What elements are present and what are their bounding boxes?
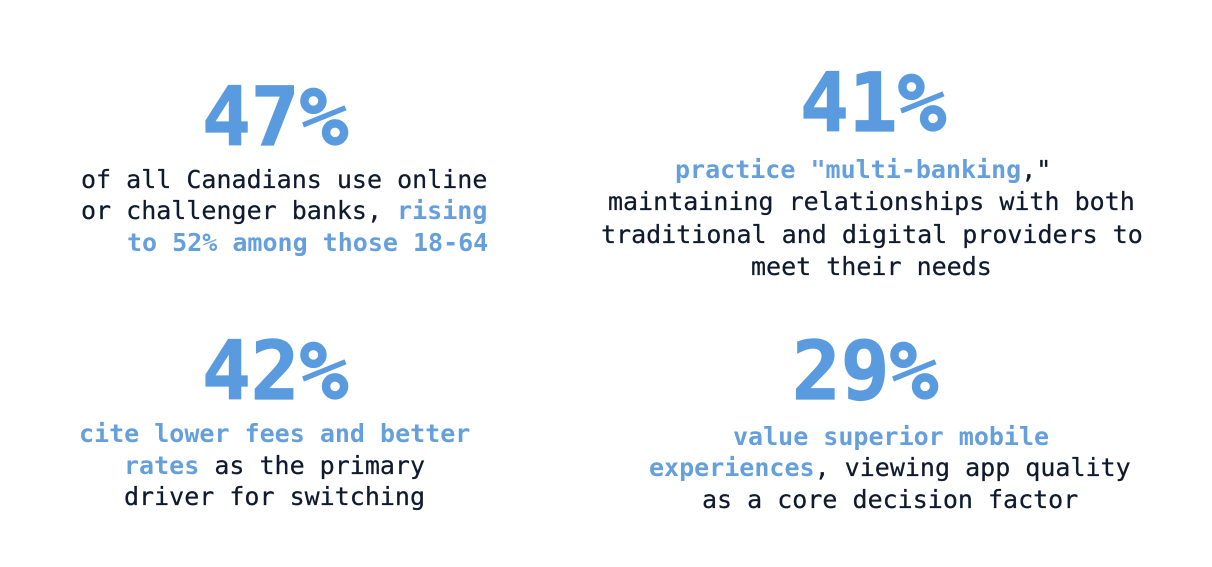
text block: mobile experiences description [649,422,1131,514]
text block: multi-banking description [601,155,1143,281]
stat number: 47%: 47% [202,71,349,165]
text block: online banks description [81,165,488,257]
text block: mobile experiences description: experiences, viewing app quality [649,453,1131,482]
panel: 47 percent stat [81,71,488,257]
text block: online banks description: of all Canadians use online [81,165,487,194]
text block: lower fees description: driver for switching [124,482,425,511]
text block: lower fees description: rates as the primary [124,451,425,480]
text block: lower fees description [79,419,470,511]
text block: lower fees description: cite lower fees and better [79,419,470,448]
text block: multi-banking description: maintaining relationships with both [608,187,1135,216]
text block: mobile experiences description: as a core decision factor [702,485,1078,514]
text block: mobile experiences description: value superior mobile [733,422,1049,451]
stat number: 41%: 41% [800,57,947,151]
text block: multi-banking description: traditional and digital providers to [601,220,1143,249]
text block: online banks description: to 52% among those 18-64 [127,228,488,257]
text block: multi-banking description: practice "multi-banking," [675,155,1051,184]
panel: 41 percent stat [601,57,1143,281]
stat number: 42%: 42% [202,325,349,419]
panel: 42 percent stat [79,325,470,511]
stat number: 29%: 29% [792,325,939,419]
panel: 29 percent stat [649,325,1131,514]
text block: online banks description: or challenger banks, rising [81,196,487,225]
text block: multi-banking description: meet their needs [751,252,992,281]
